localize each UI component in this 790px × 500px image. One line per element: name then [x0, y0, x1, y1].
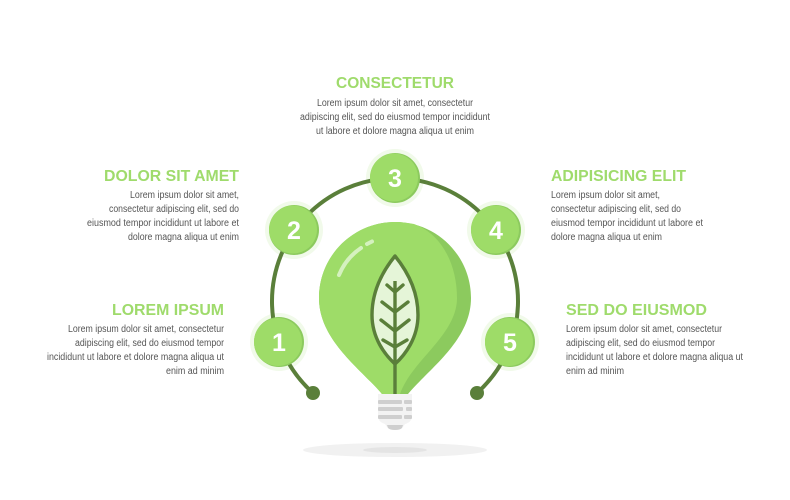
body copy: enim ad minim [166, 366, 224, 377]
step 1 badge: 1 [272, 329, 286, 357]
body copy: dolore magna aliqua ut enim [128, 232, 239, 243]
glass reflections [339, 242, 372, 275]
body copy: consectetur adipiscing elit, sed do [109, 204, 239, 215]
body copy: incididunt ut labore et dolore magna aliqua ut [566, 352, 743, 363]
text block: consectetur [300, 75, 490, 137]
body copy: adipiscing elit, sed do eiusmod tempor incididunt [300, 112, 490, 123]
body copy: eiusmod tempor incididunt ut labore et [87, 218, 239, 229]
icon: light bulb [319, 222, 471, 430]
body copy: Lorem ipsum dolor sit amet, consectetur [68, 324, 225, 335]
body copy: consectetur adipiscing elit, sed do [551, 204, 681, 215]
body copy: dolore magna aliqua ut enim [551, 232, 662, 243]
step 5 badge: 5 [503, 329, 517, 357]
step 3 badge [370, 153, 420, 203]
icon: leaf [372, 256, 418, 394]
text block: sed do eiusmod [566, 302, 743, 377]
body copy: Lorem ipsum dolor sit amet, [551, 190, 660, 201]
body copy: Lorem ipsum dolor sit amet, [130, 190, 239, 201]
body copy: enim ad minim [566, 366, 624, 377]
heading: CONSECTETUR [336, 75, 454, 92]
ground shadow [303, 443, 487, 457]
body copy [300, 98, 490, 137]
body copy [47, 324, 225, 377]
text block: lorem ipsum [47, 302, 225, 377]
step 2 badge [269, 205, 319, 255]
body copy [87, 190, 239, 243]
text block: dolor sit amet [87, 168, 239, 243]
connector arc [272, 178, 518, 400]
step 5 badge [485, 317, 535, 367]
bulb glass [319, 222, 471, 394]
step 4 badge [471, 205, 521, 255]
text block: adipisicing elit [551, 168, 703, 243]
body copy: incididunt ut labore et dolore magna aliqua ut [47, 352, 224, 363]
heading: LOREM IPSUM [112, 302, 224, 319]
body copy: eiusmod tempor incididunt ut labore et [551, 218, 703, 229]
body copy: adipiscing elit, sed do eiusmod tempor [566, 338, 716, 349]
body copy: ut labore et dolore magna aliqua ut enim [316, 126, 474, 137]
step 3 badge: 3 [388, 165, 402, 193]
body copy [551, 190, 703, 243]
body copy: Lorem ipsum dolor sit amet, consectetur [566, 324, 723, 335]
step 2 badge: 2 [287, 217, 301, 245]
badge halos [250, 149, 539, 371]
bulb highlight side [319, 222, 457, 394]
body copy: Lorem ipsum dolor sit amet, consectetur [317, 98, 474, 109]
heading: SED DO EIUSMOD [566, 302, 707, 319]
body copy [566, 324, 743, 377]
step 1 badge [254, 317, 304, 367]
bulb base [378, 394, 412, 430]
heading: ADIPISICING ELIT [551, 168, 686, 185]
step 4 badge: 4 [489, 217, 503, 245]
body copy: adipiscing elit, sed do eiusmod tempor [75, 338, 225, 349]
heading: DOLOR SIT AMET [104, 168, 239, 185]
